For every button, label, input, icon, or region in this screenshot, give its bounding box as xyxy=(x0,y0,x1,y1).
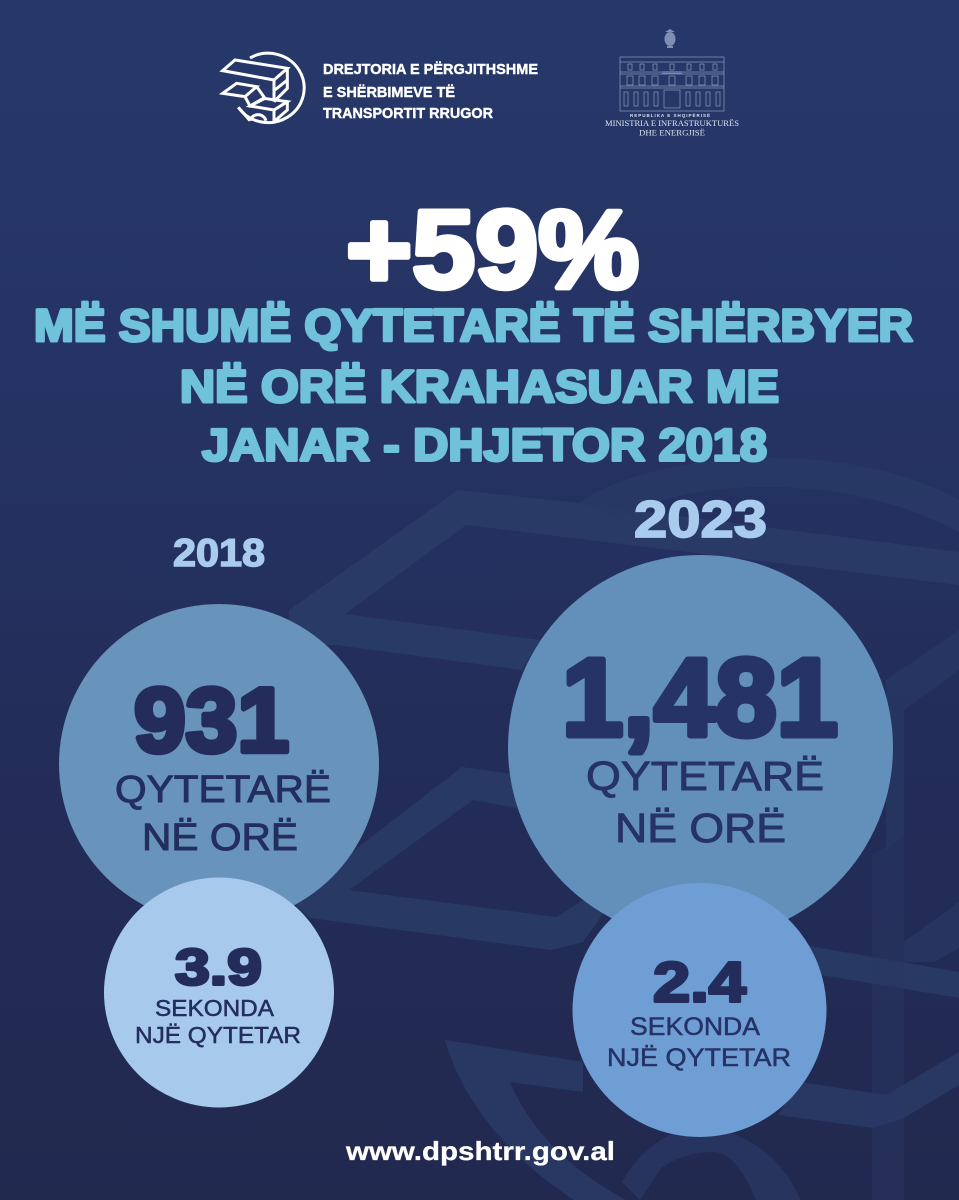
icon: ministry building xyxy=(620,57,724,111)
panel: 2018 xyxy=(59,532,379,1108)
icon: DPSHTRR logo xyxy=(223,53,304,123)
icon: emblem xyxy=(664,29,676,48)
organisation name: DREJTORIA E PËRGJITHSHME xyxy=(323,61,538,78)
circle: citizens per hour 2018 xyxy=(59,604,379,924)
value 3.9: 3.9 xyxy=(175,938,262,996)
subtitle xyxy=(34,300,913,470)
subtitle: NË ORË KRAHASUAR ME xyxy=(180,361,779,412)
label citizens per hour: QYTETARË xyxy=(115,769,331,811)
subtitle: JANAR - DHJETOR 2018 xyxy=(202,420,767,470)
label citizens per hour: QYTETARË xyxy=(586,753,824,799)
year label 2023: 2023 xyxy=(634,491,767,549)
label seconds per citizen: SEKONDA xyxy=(630,1013,760,1041)
organisation name: TRANSPORTIT RRUGOR xyxy=(323,106,494,122)
value 931: 931 xyxy=(134,670,289,772)
ministry name xyxy=(605,112,739,138)
label citizens per hour: NË ORË xyxy=(615,805,786,851)
title: +59%: +59% xyxy=(346,188,639,312)
label seconds per citizen xyxy=(607,1013,791,1072)
label seconds per citizen: NJË QYTETAR xyxy=(607,1044,791,1072)
header: DPSHTRR logo and name xyxy=(223,53,538,123)
circle: seconds per citizen 2023 xyxy=(572,883,826,1137)
value 2.4: 2.4 xyxy=(653,950,746,1014)
ministry name: MINISTRIA E INFRASTRUKTURËS xyxy=(605,118,739,128)
organisation name xyxy=(323,61,538,122)
label citizens per hour xyxy=(586,753,824,851)
value 1,481: 1,481 xyxy=(562,636,838,760)
label seconds per citizen: SEKONDA xyxy=(155,995,275,1021)
ministry name: DHE ENERGJISË xyxy=(639,128,705,138)
ministry name: REPUBLIKA E SHQIPËRISË xyxy=(630,112,710,118)
label seconds per citizen: NJË QYTETAR xyxy=(135,1022,301,1048)
website url: www.dpshtrr.gov.al xyxy=(345,1136,615,1166)
label citizens per hour: NË ORË xyxy=(142,817,298,859)
circle: citizens per hour 2023 xyxy=(508,555,893,940)
circle: seconds per citizen 2018 xyxy=(104,878,334,1108)
organisation name: E SHËRBIMEVE TË xyxy=(323,84,455,101)
header: ministry logo xyxy=(605,29,739,138)
subtitle: MË SHUMË QYTETARË TË SHËRBYER xyxy=(34,300,913,351)
year label 2018: 2018 xyxy=(173,532,265,575)
label seconds per citizen xyxy=(135,995,301,1048)
background watermark: logo shapes xyxy=(289,458,959,1200)
label citizens per hour xyxy=(115,769,331,859)
panel: 2023 xyxy=(508,491,893,1137)
